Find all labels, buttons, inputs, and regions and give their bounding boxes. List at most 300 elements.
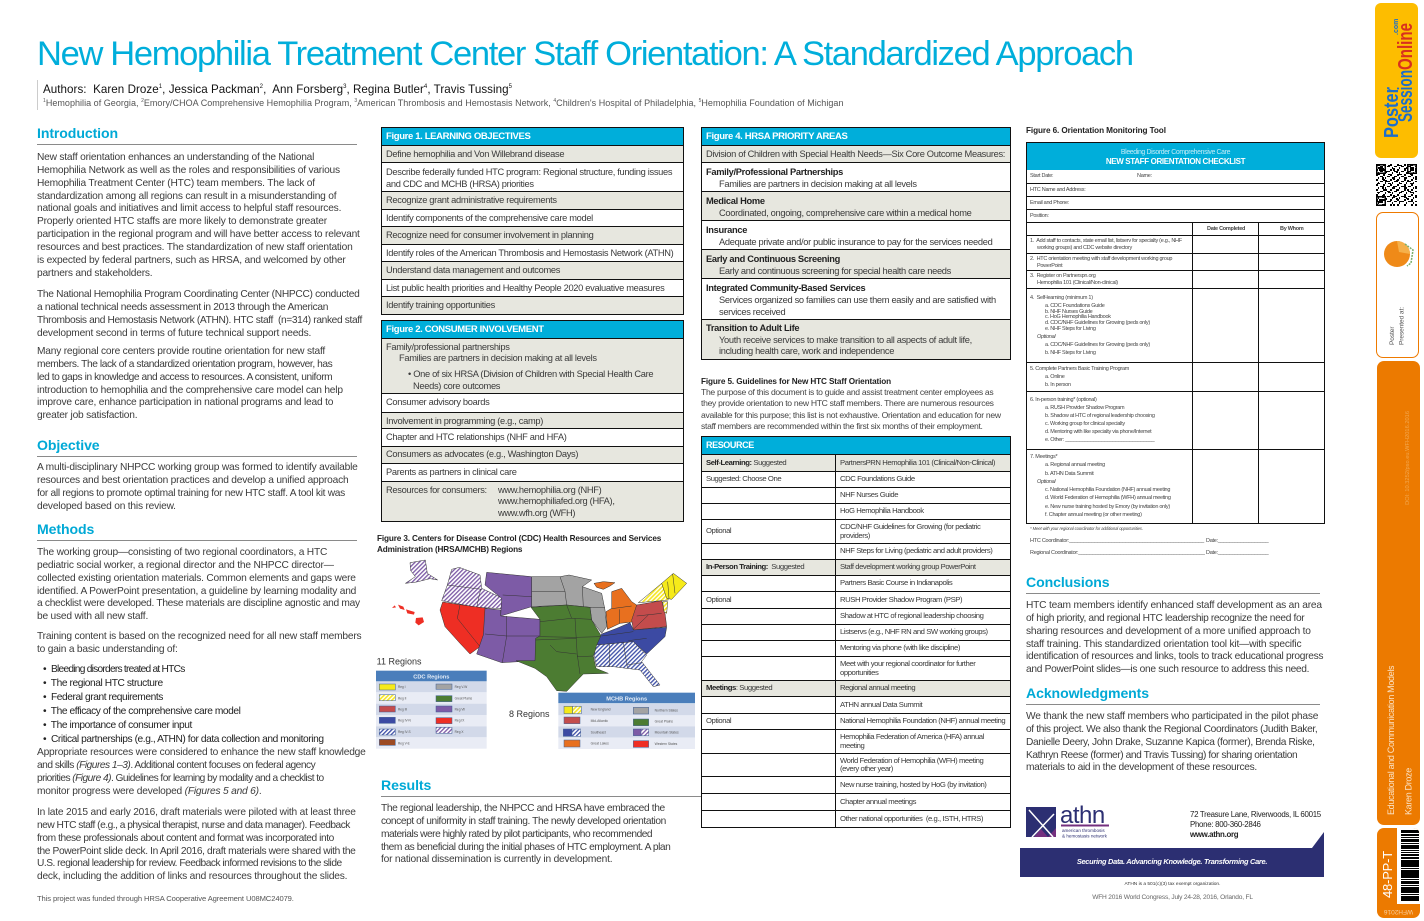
table: resources: (every other year): [840, 764, 893, 773]
heading: acknowledgments: [1026, 685, 1320, 705]
region: southeast solid blue: [597, 623, 667, 654]
checklist header: Bleeding Disorder Comprehensive Care: [1121, 149, 1230, 156]
label: 11 regions: 11 Regions: [377, 657, 422, 667]
panel: figure 2 consumer involvement: Families are partners in decision making at all levels: [399, 353, 597, 363]
table: resources: NHF Steps for Living (pediatric and adult providers): [840, 546, 992, 555]
heading: figure 3: Administration (HRSA/MCHB) Regions: [377, 545, 522, 554]
text: needs assessment: [37, 289, 362, 339]
panel: figure 4 hrsa priority areas: Transition to Adult Life: [706, 323, 799, 333]
panel: figure 4 hrsa priority areas: Families are partners in decision making at all levels: [719, 179, 917, 189]
text: pilot: deck, including the addition of links and resources throughout the slides.: [37, 871, 347, 882]
table: resources: New nurse training, hosted by HoG (by invitation): [840, 780, 986, 789]
legend: mchb regions: Northern States: [655, 708, 678, 712]
checklist column line 2: [1258, 222, 1259, 523]
panel: figure 4 hrsa priority areas: Insurance: [706, 225, 747, 235]
table: resources: ATHN annual Data Summit: [840, 700, 922, 709]
text: introduction: Hemophilia Network as well as the roles and responsibilities of various: [37, 165, 340, 176]
text: results: materials were highly rated by pilot participants, who recommended: [381, 829, 652, 840]
region: new england yellow: [638, 583, 668, 603]
text: results: [381, 803, 670, 865]
affiliations: 1Hemophilia of Georgia, 2Emory/CHOA Comprehensive Hemophilia Program, 3American Thrombosis and Hemostasis Network, 4Children's Hospital of Philadelphia, 5Hemophilia Foundation of Michigan: [43, 98, 843, 108]
panel: figure 1 learning objectives: and CDC and MCHB (HRSA) priorities: [386, 179, 534, 189]
legend: mchb regions: MCHB Regions: [606, 697, 647, 703]
panel: figure 6 checklist: a. CDC/NHF Guidelines for Growing (peds only): [1045, 342, 1150, 348]
logo: athn: & hemostasis network: [1062, 834, 1108, 838]
panel: figure 1 learning objectives: Recognize grant administrative requirements: [386, 195, 557, 205]
table: resources: World Federation of Hemophilia (WFH) meeting: [840, 756, 983, 765]
text: methods: pediatric social worker, a regional director and the NHPCC director—: [37, 560, 334, 571]
figure 2 header: Figure 2. CONSUMER INVOLVEMENT: [386, 324, 544, 335]
text: introduction: New staff orientation enhances an understanding of the National: [37, 152, 314, 163]
contact details: [1190, 810, 1321, 839]
text: appropriate resources: priorities (Figure 4). Guidelines for learning by modality and a checklist to: [37, 773, 324, 784]
heading: methods: [37, 521, 357, 541]
panel: figure 4 hrsa priority areas: including health care, work and independence: [719, 346, 894, 356]
text: conclusions: and PowerPoint slides—is one such resource to address this need.: [1026, 664, 1309, 675]
panel: figure 4 hrsa priority areas: Services organized so families can use them easily and are satisfied with: [719, 295, 996, 305]
legend: cdc regions: Reg V-E: [398, 741, 410, 745]
text: objective: for all regions to promote optimal training for new HTC staff. A tool kit was: [37, 488, 345, 499]
table: resources: Listservs (e.g., NHF RN and SW working groups): [840, 627, 988, 636]
panel: figure 2 consumer involvement: Consumer advisory boards: [386, 397, 489, 407]
doi: DOI: 10.3252/pso.eu.WFH2016.2016: [1405, 411, 1411, 505]
panel: figure 6 checklist: By Whom: [1280, 226, 1303, 232]
table: resources: PartnersPRN Hemophilia 101 (Clinical/Non-Clinical): [840, 458, 995, 467]
legend: mchb regions: Great Lakes: [591, 742, 609, 746]
logo: athn: american thrombosis: [1062, 828, 1105, 833]
panel: figure 2 consumer involvement: www.hemophilia.org (NHF): [498, 485, 601, 495]
table: resources: meeting: [840, 740, 864, 750]
text: pilot: [37, 807, 356, 882]
panel: figure 4 hrsa priority areas: Early and continuous screening for special health care needs: [719, 266, 951, 276]
text: results: concept of uniformity in staff training. The newly developed orientation: [381, 816, 666, 827]
table: resources: In-Person Training: Suggested: [706, 562, 804, 571]
text: orientation gap: members. The lack of a standardized orientation program, however, has: [37, 359, 332, 370]
text: Date:__________________: [1206, 550, 1268, 556]
panel: figure 6 checklist: Hemophilia 101 (Clinical/Non-clinical): [1037, 280, 1118, 286]
legend: mchb regions: Western States: [655, 742, 678, 746]
panel: figure 1 learning objectives: Identify training opportunities: [386, 300, 495, 310]
panel: figure 6 checklist: working groups) and CDC website directory: [1037, 244, 1132, 250]
heading: objective: [37, 437, 357, 457]
panel: figure 6 checklist: 3. Register on Partnerspn.org: [1030, 273, 1096, 279]
text: orientation gap: led to gaps in knowledge and access to resources. A consistent, uniform: [37, 372, 332, 383]
list: understanding topics: • Federal grant requirements: [43, 692, 163, 703]
panel: figure 6 checklist: 5. Complete Partners Basic Training Program: [1030, 366, 1129, 372]
presented at label: Presented at:: [1398, 307, 1406, 345]
table: resources: Other national opportunities (e.g., ISTH, HTRS): [840, 814, 983, 823]
banner: tagline: Securing Data. Advancing Knowledge. Transforming Care.: [1077, 857, 1267, 866]
table: resources: Regional annual meeting: [840, 683, 915, 692]
legend: cdc regions: Great Plains: [455, 696, 472, 700]
panel: figure 2 consumer involvement: Needs) core outcomes: [413, 381, 500, 391]
label: 8 regions: 8 Regions: [509, 709, 550, 719]
text: introduction: partners and stakeholders.: [37, 268, 152, 279]
logo: athn: [1026, 802, 1109, 838]
table: resources: HoG Hemophilia Handbook: [840, 506, 924, 515]
panel: figure 6 checklist: b. ATHN Data Summit: [1045, 470, 1094, 476]
category label: Karen Droze: [1404, 768, 1414, 815]
legend: cdc regions: [376, 671, 487, 749]
sidebar: poster session logo: Online: [1395, 23, 1417, 70]
list: understanding topics: • The importance of consumer input: [43, 720, 192, 731]
table: resources: Meetings: Suggested: [706, 683, 772, 692]
text: conclusions: [1026, 600, 1324, 675]
panel: figure 2 consumer involvement: Parents as partners in clinical care: [386, 467, 517, 477]
panel: figure 6 checklist: c. National Hemophilia Foundation (NHF) annual meeting: [1045, 487, 1170, 493]
text: introduction: standardization among all regions can result in a misunderstanding of: [37, 191, 336, 202]
legend: cdc regions: Reg V-W: [455, 685, 467, 689]
checklist rows: [1027, 170, 1324, 184]
congress code: WFH2016: [1384, 908, 1413, 915]
panel: figure 4 hrsa priority areas: [701, 127, 1011, 360]
text: pilot: the PowerPoint slide deck. In April 2016, draft materials were shared with the: [37, 846, 355, 857]
region: mountain purple: [485, 572, 532, 616]
checklist column line 1: [1192, 222, 1193, 523]
region: great lakes orange: [594, 582, 615, 589]
sidebar: orange category bar: [1377, 361, 1420, 825]
text: methods: The working group—consisting of two regional coordinators, a HTC: [37, 547, 327, 558]
sidebar: poster id with barcode: [1377, 828, 1420, 918]
panel: figure 6 checklist: e. Other: ________________________________: [1045, 437, 1154, 443]
text: figure 5: [701, 387, 1002, 431]
panel: figure 1 learning objectives: Identify components of the comprehensive care model: [386, 213, 593, 223]
panel: figure 6 checklist: e. NHF Steps for Living: [1045, 326, 1096, 332]
text: methods: [37, 547, 360, 622]
legend: cdc regions: Reg VII: [455, 707, 465, 711]
text: acknowledgments: of this project. We also thank the Regional Coordinators (Judith Baker,: [1026, 724, 1317, 735]
title: New Hemophilia Treatment Center Staff Orientation: A Standardized Approach: [37, 35, 1133, 73]
text: conclusions: identification of resources and links, tools to track educational progress: [1026, 651, 1323, 662]
text: orientation gap: [37, 346, 343, 421]
heading: figure 5: Figure 5. Guidelines for New HTC Staff Orientation: [701, 377, 891, 386]
panel: figure 2 consumer involvement: www.wfh.org (WFH): [498, 508, 575, 518]
sidebar: poster session logo: [1375, 3, 1418, 158]
panel: figure 6 checklist: d. World Federation of Hemophilia (WFH) annual meeting: [1045, 495, 1171, 501]
text: objective: A multi-disciplinary NHPCC working group was formed to identify available: [37, 462, 358, 473]
panel: figure 6 checklist: b. In person: [1045, 382, 1071, 388]
table: resources: Shadow at HTC of regional leadership choosing: [840, 611, 983, 620]
text: figure 5: available for this purpose; this list is not exhaustive. Orientation and education for new: [701, 410, 1001, 420]
contact details: www.athn.org: [1190, 830, 1238, 839]
heading: results: [381, 777, 701, 797]
text: pilot: In late 2015 and early 2016, draft materials were piloted with at least three: [37, 807, 356, 818]
panel: figure 1 learning objectives: Define hemophilia and Von Willebrand disease: [386, 149, 564, 159]
text: appropriate resources: monitor progress were developed (Figures 5 and 6).: [37, 786, 261, 797]
legend: cdc regions: Reg II: [398, 696, 407, 700]
panel: figure 6 checklist: b. NHF Nurses Guide: [1045, 309, 1092, 315]
list: understanding topics: • Bleeding disorders treated at HTCs: [43, 664, 185, 675]
checklist signature: htc coordinator: HTC Coordinator:________________________________________________: [1030, 538, 1204, 544]
table: resources: Optional: [706, 595, 731, 604]
panel: figure 4 hrsa priority areas: Family/Professional Partnerships: [706, 167, 843, 177]
logo: athn: athn: [1060, 802, 1105, 829]
table: resources: Optional: [706, 526, 731, 535]
category label: [1386, 666, 1414, 815]
contact details: 72 Treasure Lane, Riverwoods, IL 60015: [1190, 810, 1321, 819]
region: west red: [440, 602, 487, 654]
legend: cdc regions: Reg IV-N: [398, 719, 412, 723]
panel: figure 2 consumer involvement: Consumers as advocates (e.g., Washington Days): [386, 449, 578, 459]
text: orientation gap: improve care, enhance participation in national programs and lead to: [37, 397, 333, 408]
panel: figure 6 checklist: Position:: [1030, 213, 1049, 219]
banner: tagline: [1020, 832, 1324, 877]
text: needs assessment: The National Hemophilia Program Coordinating Center (NHPCC) conducted: [37, 289, 359, 300]
legend: mchb regions: [558, 693, 695, 749]
text: appropriate resources: Appropriate resources were considered to enhance the new staff knowledge: [37, 747, 366, 758]
checklist header: NEW STAFF ORIENTATION CHECKLIST: [1106, 157, 1245, 166]
heading: acknowledgments: Acknowledgments: [1026, 685, 1149, 701]
checklist footnote: * Meet with your regional coordinator for additional opportunities.: [1030, 526, 1143, 531]
text: pilot: from these professionals about content and format was incorporated into: [37, 833, 334, 844]
checklist rows: Name:: [1137, 173, 1152, 179]
list: understanding topics: • Critical partnerships (e.g., ATHN) for data collection and monitoring: [43, 734, 324, 745]
text: introduction: resources and best practices. The standardization of new staff orientation: [37, 242, 353, 253]
category label: Educational and Communication Models: [1386, 666, 1396, 815]
panel: figure 1 learning objectives: Identify roles of the American Thrombosis and Hemostasis Network (ATHN): [386, 248, 673, 258]
athn tax note: ATHN is a 501(c)(3) tax exempt organization.: [1125, 882, 1220, 887]
legend: mchb regions: New England: [591, 708, 611, 712]
panel: figure 2 consumer involvement: Involvement in programming (e.g., camp): [386, 416, 543, 426]
text: needs assessment: Thrombosis and Hemostasis Network (ATHN). HTC staff (n=314) ranked staff: [37, 315, 362, 326]
author divider: [37, 80, 38, 110]
panel: figure 1 learning objectives: Describe federally funded HTC program: Regional structure, funding issues: [386, 167, 672, 177]
text: methods: a checklist were developed. These materials are discipline agnostic and may: [37, 598, 360, 609]
panel: figure 2 consumer involvement: Resources for consumers:: [386, 485, 487, 495]
table: resources: RUSH Provider Shadow Program (PSP): [840, 595, 962, 604]
figure 1 header: Figure 1. LEARNING OBJECTIVES: [386, 131, 531, 142]
text: results: them as beneficial during the initial phases of HTC employment. A plan: [381, 842, 670, 853]
funding note: This project was funded through HRSA Cooperative Agreement U08MC24079.: [37, 894, 294, 903]
panel: figure 6 checklist: d. CDC/NHF Guidelines for Growing (peds only): [1045, 320, 1150, 326]
congress logo: [1384, 241, 1414, 267]
checklist signature: regional coordinator: Regional Coordinator:_____________________________________________: [1030, 550, 1205, 556]
text: acknowledgments: materials to aid in the development of these resources.: [1026, 762, 1257, 773]
text: objective: [37, 462, 358, 512]
heading: objective: Objective: [37, 437, 100, 453]
panel: figure 6 checklist: PowerPoint: [1037, 262, 1062, 268]
panel: figure 6 checklist: HTC Name and Address:: [1030, 187, 1085, 193]
text: orientation gap: greater job satisfaction.: [37, 410, 137, 421]
sidebar: poster session logo: Session: [1395, 70, 1417, 122]
presented at label: Poster: [1389, 326, 1396, 345]
panel: figure 6 checklist: b. NHF Steps for Living: [1045, 350, 1096, 356]
legend: mchb regions: Great Plains: [655, 720, 673, 724]
region: northern grey: [532, 575, 607, 633]
panel: figure 1 learning objectives: [381, 127, 684, 315]
panel: figure 6 checklist: 2. HTC orientation meeting with staff development working group: [1030, 256, 1172, 262]
panel: figure 6 checklist: d. Mentoring with like specialty via phone/Internet: [1045, 429, 1151, 435]
text: methods: identified. A PowerPoint presentation, a guideline by learning modality and: [37, 586, 356, 597]
text: acknowledgments: We thank the new staff members who participated in the pilot phase: [1026, 711, 1318, 722]
panel: figure 4 hrsa priority areas: Youth receive services to make transition to all aspects of adult life,: [719, 335, 972, 345]
text: conclusions: staff training. This standardized orientation tool kit—with specific: [1026, 639, 1301, 650]
panel: figure 4 hrsa priority areas: Integrated Community-Based Services: [706, 283, 865, 293]
text: needs assessment: development second in terms of future technical support needs.: [37, 328, 311, 339]
panel: figure 2 consumer involvement: Chapter and HTC relationships (NHF and HFA): [386, 432, 567, 442]
text: introduction: is expected by federal partners, such as HRSA, and welcomed by other: [37, 255, 346, 266]
text: introduction: [37, 152, 360, 279]
heading: conclusions: [1026, 574, 1320, 594]
table: resources: Meet with your regional coordinator for further: [840, 659, 975, 668]
heading: introduction: Introduction: [37, 125, 118, 141]
table: resources: opportunities: [840, 668, 878, 676]
figure 1 header: [382, 128, 683, 146]
table: resources: Staff development working group PowerPoint: [840, 562, 976, 571]
resource header: [702, 437, 1010, 455]
panel: figure 2 consumer involvement: • One of six HRSA (Division of Children with Special Health Care: [408, 369, 653, 379]
text: training content: Training content is based on the recognized need for all new staff members: [37, 631, 361, 642]
table: resources: Partners Basic Course in Indianapolis: [840, 578, 952, 587]
legend: cdc regions: CDC Regions: [413, 675, 449, 681]
contact details: Phone: 800-360-2846: [1190, 820, 1261, 829]
legend: cdc regions: Reg IX: [455, 719, 465, 723]
legend: mchb regions: Southeast: [591, 730, 606, 734]
list: understanding topics: • The efficacy of the comprehensive care model: [43, 706, 241, 717]
list: understanding topics: • The regional HTC structure: [43, 678, 163, 689]
table: resources: Mentoring via phone (with like discipline): [840, 643, 960, 652]
checklist header: [1027, 143, 1324, 170]
region: great plains green: [516, 605, 608, 691]
panel: figure 6 checklist: a. Online: [1045, 374, 1065, 380]
table: resources: CDC Foundations Guide: [840, 474, 915, 483]
table: resources: Hemophilia Federation of America (HFA) annual: [840, 732, 984, 741]
region: mid-atlantic: [632, 601, 667, 630]
barcode area: [1397, 828, 1420, 904]
panel: figure 6 checklist: Date Completed: [1207, 226, 1245, 232]
panel: figure 4 hrsa priority areas: Adequate private and/or public insurance to pay for the services needed: [719, 237, 992, 247]
panel: figure 6 checklist: a. RUSH Provider Shadow Program: [1045, 405, 1124, 411]
heading: conclusions: Conclusions: [1026, 574, 1109, 590]
panel: figure 1 learning objectives: Understand data management and outcomes: [386, 265, 560, 275]
heading: results: Results: [381, 777, 431, 793]
legend: cdc regions: Reg IV-S: [398, 730, 411, 734]
legend: cdc regions: Reg I: [398, 685, 406, 689]
text: results: The regional leadership, the NHPCC and HRSA have embraced the: [381, 803, 665, 814]
table: resources: Optional: [706, 716, 731, 725]
text: figure 5: The purpose of this document is to guide and assist treatment center employees as: [701, 387, 993, 397]
region: southeast hatched: [594, 642, 660, 687]
text: introduction: Hemophilia Treatment Center (HTC) team members. The lack of: [37, 178, 315, 189]
text: introduction: national goals and initiatives and limit access to helpful staff resources.: [37, 203, 341, 214]
sidebar: qr code: [1376, 164, 1417, 206]
heading: methods: Methods: [37, 521, 94, 537]
checklist rows: Start Date:: [1030, 173, 1053, 179]
figure 4 header: [702, 128, 1010, 146]
table: resources: CDC/NHF Guidelines for Growing (for pediatric: [840, 522, 980, 531]
panel: figure 6 checklist: f. Chapter annual meeting (or other meeting): [1045, 512, 1142, 518]
text: figure 5: staff members are recommended within the first six months of their employment.: [701, 421, 983, 431]
panel: figure 4 hrsa priority areas: Coordinated, ongoing, comprehensive care within a medical home: [719, 208, 972, 218]
text: pilot: new HTC staff (e.g., a physical therapist, nurse and data manager). Feedback: [37, 820, 350, 831]
table: resources: NHF Nurses Guide: [840, 490, 898, 499]
text: appropriate resources: [37, 747, 366, 797]
text: appropriate resources: and skills (Figures 1–3). Additional content focuses on federal agency: [37, 760, 315, 771]
sidebar: poster session logo: Poster: [1381, 87, 1403, 138]
region: northwest hatched: [392, 560, 687, 691]
panel: figure 6 checklist: 4. Self-learning (minimum 1): [1030, 295, 1093, 301]
authors: Authors: Karen Droze1, Jessica Packman2, Ann Forsberg3, Regina Butler4, Travis Tussing5: [43, 83, 512, 96]
text: orientation gap: introduction to hemophilia and the comprehensive care model can help: [37, 385, 343, 396]
text: introduction: Properly oriented HTC staffs are more likely to demonstrate greater: [37, 216, 327, 227]
text: methods: collected existing orientation materials. Common elements and gaps were: [37, 573, 356, 584]
table: resources: Chapter annual meetings: [840, 797, 916, 806]
heading: introduction: [37, 125, 357, 145]
text: orientation gap: Many regional core centers provide routine orientation for new staff: [37, 346, 325, 357]
text: training content: [37, 631, 362, 655]
table: resources: Suggested: Choose One: [706, 474, 781, 483]
text: training content: to gain a basic understanding of:: [37, 644, 178, 655]
text: needs assessment: a national technical needs assessment in 2013 through the American: [37, 302, 328, 313]
text: objective: resources and best orientation practices and develop a unified approach: [37, 475, 348, 486]
panel: figure 1 learning objectives: List public health priorities and Healthy People 2020 evaluative measures: [386, 283, 664, 293]
panel: figure 1 learning objectives: Recognize need for consumer involvement in planning: [386, 230, 593, 240]
panel: figure 4 hrsa priority areas: services received: [719, 307, 785, 317]
panel: figure 6 checklist: 7. Meetings*: [1030, 454, 1057, 460]
panel: figure 6 checklist: b. Shadow at HTC of regional leadership choosing: [1045, 413, 1155, 419]
figure 4 header: Figure 4. HRSA PRIORITY AREAS: [706, 131, 848, 142]
text: pilot: U.S. regional leadership for review. Feedback informed revisions to the slide: [37, 858, 342, 869]
sidebar: poster session logo: .com: [1393, 19, 1400, 35]
text: acknowledgments: [1026, 711, 1318, 773]
text: introduction: participation in the regional program and will have better access to relevant: [37, 229, 360, 240]
text: acknowledgments: Kathryn Reese (former) and Travis Tussing) for sharing orientation: [1026, 750, 1297, 761]
table: resources: providers): [840, 530, 870, 540]
panel: figure 2 consumer involvement: www.hemophiliafed.org (HFA),: [498, 496, 615, 506]
panel: figure 2 consumer involvement: Family/professional partnerships: [386, 342, 510, 352]
panel: figure 6 checklist: a. Regional annual meeting: [1045, 462, 1105, 468]
panel: figure 6 checklist: 1. Add staff to contacts, state email list, listserv for specialty (e.g., NHF: [1030, 238, 1182, 244]
panel: figure 6 checklist: Email and Phone:: [1030, 200, 1069, 206]
text: objective: developed based on this review.: [37, 501, 176, 512]
text: Date:__________________: [1206, 538, 1268, 544]
table: resources: National Hemophilia Foundation (NHF) annual meeting: [840, 716, 1005, 725]
text: figure 5: they provide orientation to new HTC staff members. There are numerous resources: [701, 398, 994, 408]
panel: figure 6 checklist: Optional: [1037, 334, 1055, 340]
panel: figure 6 checklist: e. New nurse training hosted by Emory (by invitation only): [1045, 504, 1170, 510]
figure 2 header: [382, 321, 683, 339]
legend: cdc regions: Reg III: [398, 707, 407, 711]
congress note: WFH 2016 World Congress, July 24-28, 2016, Orlando, FL: [1092, 894, 1253, 901]
poster number: 48-PP-T: [1380, 851, 1395, 898]
text: acknowledgments: Danielle Deery, John Drake, Suzanne Kapica (former), Brenda Riske,: [1026, 737, 1315, 748]
heading: figure 3: [377, 534, 661, 554]
text: results: for national dissemination is currently in development.: [381, 854, 612, 865]
presented at label: [1389, 307, 1406, 345]
sidebar: presented at box: [1376, 212, 1419, 358]
text: conclusions: HTC team members identify enhanced staff development as an area: [1026, 600, 1322, 611]
legend: cdc regions: Reg X: [455, 730, 464, 734]
map: HRSA regions with legends: [376, 560, 695, 749]
panel: figure 6 checklist: c. Working group for clinical specialty: [1045, 421, 1125, 427]
panel: figure 6 checklist: a. CDC Foundations Guide: [1045, 303, 1105, 309]
heading: figure 6: Figure 6. Orientation Monitoring Tool: [1026, 126, 1166, 135]
text: methods: be used with all new staff.: [37, 611, 148, 622]
panel: figure 6 checklist: [1026, 142, 1325, 524]
heading: figure 3: Figure 3. Centers for Disease Control (CDC) Health Resources and Services: [377, 534, 661, 543]
panel: figure 2 consumer involvement: [381, 320, 684, 522]
panel: figure 4 hrsa priority areas: Medical Home: [706, 196, 765, 206]
list: understanding topics: [43, 664, 324, 745]
panel: figure 6 checklist: 6. In-person training* (optional): [1030, 397, 1097, 403]
legend: mchb regions: Mountain States: [655, 731, 679, 735]
resource header: RESOURCE: [706, 440, 754, 450]
panel: figure 6 checklist: Optional: [1037, 479, 1055, 485]
text: conclusions: sharing resources and development of a more unified approach to: [1026, 626, 1311, 637]
table: resources: Self-Learning: Suggested: [706, 458, 786, 467]
panel: figure 4 hrsa priority areas: Early and Continuous Screening: [706, 254, 840, 264]
table: resources: [701, 436, 1011, 828]
